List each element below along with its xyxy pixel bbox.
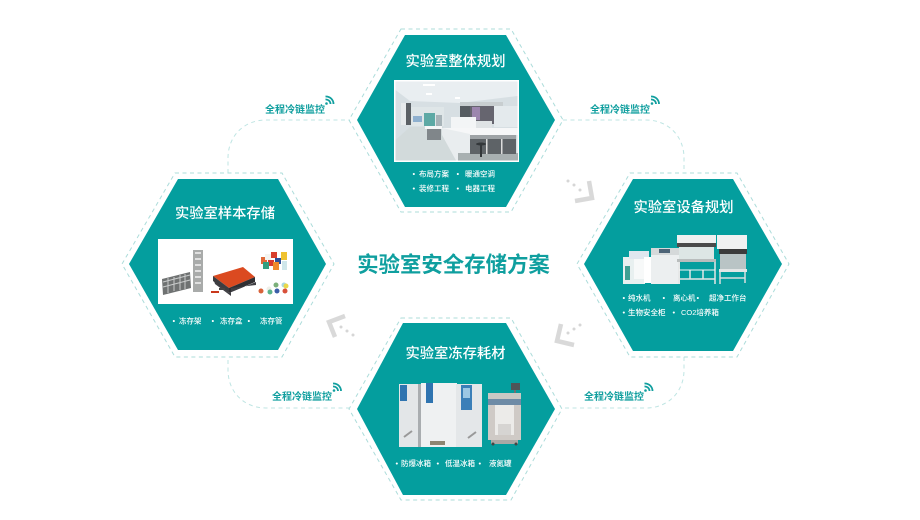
arrow: bottom to left — [329, 316, 354, 337]
feature list: • — [248, 316, 250, 326]
feature list: 防爆冰箱 — [401, 458, 431, 468]
photo: laboratory interior — [394, 80, 519, 162]
label: cold chain monitoring top right — [590, 96, 659, 116]
feature list: • — [212, 316, 214, 326]
feature list: 布局方案 — [419, 168, 449, 178]
dashed connector: right to bottom — [562, 357, 684, 408]
label: cold chain monitoring top left: 全程冷链监控 — [265, 103, 325, 116]
feature list: 纯水机 — [628, 292, 651, 302]
icon: wifi signal — [325, 96, 334, 105]
feature list: 低温冰箱 — [445, 458, 475, 468]
feature list: CO2培养箱 — [681, 307, 719, 317]
feature list — [172, 316, 283, 326]
feature list: 超净工作台 — [709, 292, 746, 302]
label: cold chain monitoring top right: 全程冷链监控 — [590, 103, 650, 116]
label: cold chain monitoring bottom right — [584, 383, 652, 403]
label: cold chain monitoring bottom left — [272, 383, 341, 403]
feature list — [396, 458, 512, 468]
dashed connector: bottom to left — [228, 357, 350, 408]
hexagon outline — [349, 318, 562, 500]
hexagon outline — [349, 29, 563, 212]
center title: 实验室安全存储方案 — [357, 252, 550, 277]
label: cold chain monitoring top left — [265, 96, 334, 116]
image: lab equipment — [623, 235, 747, 284]
arrow: top to right — [566, 180, 592, 201]
arrow: right to bottom — [557, 324, 582, 345]
panel: laboratory overall planning — [349, 29, 563, 212]
feature list: 冻存架 — [179, 316, 202, 326]
icon: wifi signal — [644, 383, 652, 392]
heading: 实验室设备规划 — [633, 198, 734, 216]
label: cold chain monitoring bottom left: 全程冷链监控 — [272, 390, 332, 403]
hexagon fill — [357, 35, 555, 207]
hexagon outline — [577, 173, 789, 357]
feature list: • — [396, 459, 398, 468]
feature list: • — [172, 316, 176, 326]
panel: laboratory sample storage — [122, 173, 334, 357]
feature list: 暖通空调 — [465, 168, 495, 178]
panel: laboratory equipment planning — [577, 173, 789, 357]
feature list: • — [436, 459, 440, 468]
image: freezers and liquid nitrogen tank — [399, 383, 521, 447]
dashed connector: top to right — [563, 120, 684, 173]
feature list — [622, 292, 746, 317]
feature list: • — [622, 294, 626, 302]
feature list: • — [456, 184, 460, 193]
feature list — [412, 168, 495, 193]
label: cold chain monitoring bottom right: 全程冷链监控 — [584, 390, 644, 403]
feature list: • — [672, 308, 676, 317]
heading: 实验室样本存储 — [175, 204, 275, 222]
feature list: • — [662, 294, 666, 302]
feature list: • — [412, 184, 416, 193]
icon: wifi signal — [651, 96, 659, 105]
feature list: • — [696, 294, 700, 302]
feature list: 液氮罐 — [489, 458, 512, 468]
feature list: 装修工程 — [419, 183, 449, 193]
feature list: • — [412, 170, 416, 178]
heading: 实验室整体规划 — [405, 52, 506, 70]
hexagon fill — [129, 179, 326, 350]
feature list: 冻存管 — [260, 316, 283, 326]
feature list: 生物安全柜 — [628, 307, 666, 317]
feature list: 冻存盒 — [220, 316, 243, 326]
feature list: 离心机 — [673, 292, 696, 302]
image: freezer racks, boxes and tubes — [158, 239, 293, 304]
hexagon fill — [357, 323, 555, 495]
hexagon fill — [584, 179, 782, 351]
dashed connector: left to top — [228, 120, 350, 173]
feature list: • — [622, 308, 626, 317]
heading: 实验室冻存耗材 — [405, 344, 506, 362]
feature list: • — [456, 170, 460, 178]
feature list: • — [478, 459, 482, 468]
feature list: 电器工程 — [465, 183, 495, 193]
icon: wifi signal — [333, 383, 341, 392]
hexagon outline — [122, 173, 334, 357]
panel: laboratory frozen consumables — [349, 318, 562, 500]
